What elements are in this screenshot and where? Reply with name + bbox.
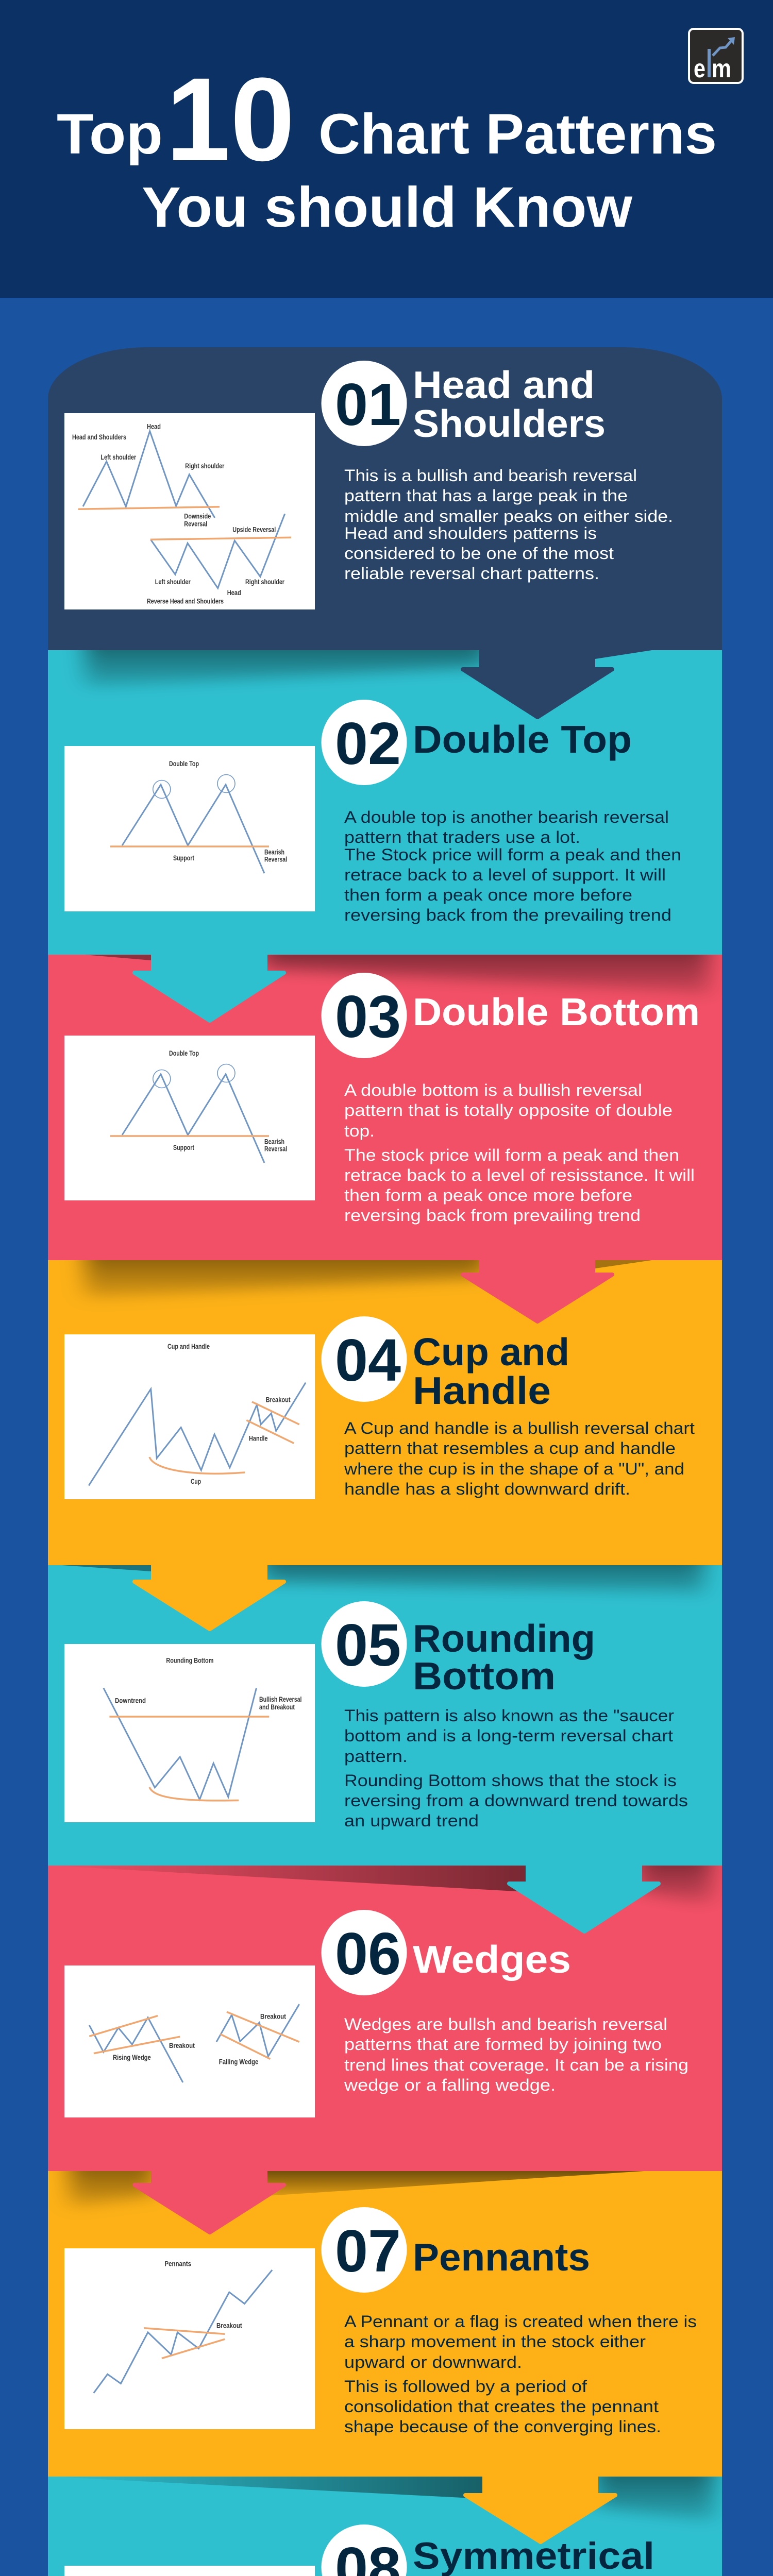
heading: cup and handle [413,1330,569,1412]
text block 07 [344,2312,697,2436]
number badge 03 [322,973,407,1058]
chart: head and shoulders: Head [147,423,161,431]
panel: 02 double top [48,634,722,955]
text block 06: patterns that are formed by joining two [344,2035,662,2054]
panel: 01 head and shoulders [48,347,722,650]
arrow 01 to 02 [463,648,612,717]
chart: cup and handle: Handle [249,1434,268,1442]
chart: double top: Double Top [169,760,199,768]
chart: double top: Bearish [264,848,284,856]
text block 03: retrace back to a level of resisstance. It will [344,1166,695,1184]
text block 05: This pattern is also known as the "saucer [344,1706,674,1725]
number badge 03: 03 [335,983,401,1050]
heading: double top: Double Top [413,718,632,761]
text block 02 [344,808,681,924]
text block 07: upward or downward. [344,2353,522,2371]
chart: head and shoulders: Right shoulder [245,578,285,586]
arrow 06 to 07 [135,2169,284,2232]
heading: pennants: Pennants [413,2235,590,2279]
chart: wedges: Falling Wedge [219,2058,259,2065]
chart: wedges: Rising Wedge [113,2054,151,2061]
icon: elm logo: e [694,54,705,83]
text block 05: bottom and is a long-term reversal chart [344,1726,673,1745]
chart: head and shoulders: Head [227,589,241,597]
number badge 02 [322,700,407,785]
text block 04: handle has a slight downward drift. [344,1480,630,1498]
number badge 05 [322,1601,407,1687]
number badge 01 [322,361,407,446]
text block 04: pattern that resembles a cup and handle [344,1439,676,1458]
text block 06: Wedges are bullsh and bearish reversal [344,2015,667,2033]
chart: head and shoulders: Reversal [184,520,207,528]
number badge 01: 01 [335,371,401,438]
chart: rounding bottom: and Breakout [259,1703,295,1711]
text block 03: pattern that is totally opposite of double [344,1101,673,1120]
chart: head and shoulders: Left shoulder [100,453,137,461]
text block 03: then form a peak once more before [344,1186,632,1205]
chart: head and shoulders: Reverse Head and Shoulders [147,598,224,605]
heading: head and shoulders: Head and [413,363,595,406]
heading: head and shoulders [413,363,606,445]
heading: cup and handle: Handle [413,1369,551,1412]
text block 02: then form a peak once more before [344,886,632,904]
chart: double bottom: Double Top [169,1049,199,1057]
text block 02: pattern that traders use a lot. [344,828,580,846]
heading: rounding bottom: Rounding [413,1617,595,1660]
number badge 04 [322,1316,407,1402]
panel: 08 symmetrical triangles [48,2477,722,2576]
heading: rounding bottom: Bottom [413,1654,556,1698]
chart: pennants: Breakout [216,2322,242,2330]
chart: wedges: Breakout [169,2042,195,2049]
text block 05: pattern. [344,1747,408,1766]
title: Top [57,103,163,166]
arrow 07 to 08 [465,2475,615,2542]
heading: symmetrical triangles: Symmetrical [413,2535,654,2576]
text block 02: reversing back from the prevailing trend [344,906,671,924]
text block 02: A double top is another bearish reversal [344,808,669,826]
text block 05: reversing from a downward trend towards [344,1791,688,1810]
text block 03: reversing back from prevailing trend [344,1206,641,1225]
text block 07: consolidation that creates the pennant [344,2397,659,2416]
number badge 04: 04 [335,1327,401,1394]
chart: head and shoulders: Downside [184,513,211,520]
arrow 02 to 03 [135,953,284,1021]
text block 01: considered to be one of the most [344,544,614,563]
number badge 05: 05 [335,1612,401,1679]
title: Chart Patterns [318,103,717,166]
chart: wedges: Breakout [260,2012,286,2020]
text block 03: top. [344,1122,375,1140]
chart: cup and handle: Cup and Handle [167,1343,210,1350]
icon: elm logo [689,29,743,83]
chart: head and shoulders: Left shoulder [155,578,191,586]
title [57,53,717,239]
number badge 07: 07 [335,2217,401,2284]
chart: head and shoulders: Head and Shoulders [72,433,126,441]
number badge 06 [322,1910,407,1995]
text block 05: Rounding Bottom shows that the stock is [344,1771,677,1790]
chart: cup and handle: Cup [191,1478,201,1485]
number badge 06: 06 [335,1920,401,1987]
chart: double top: Reversal [264,856,287,863]
panel: 07 pennants [48,2156,722,2477]
text block 04: where the cup is in the shape of a "U", and [344,1460,684,1478]
title: You should Know [142,176,632,239]
text block 07: A Pennant or a flag is created when there is [344,2312,697,2331]
chart: rounding bottom: Bullish Reversal [259,1696,302,1703]
chart: double bottom: Reversal [264,1145,287,1153]
text block 07: shape because of the converging lines. [344,2417,661,2436]
heading: rounding bottom [413,1617,595,1698]
chart: double bottom: Support [173,1144,194,1151]
chart: double bottom: Bearish [264,1138,284,1146]
header band [0,0,773,298]
text block 01: pattern that has a large peak in the [344,486,628,505]
text block 01 [344,466,673,583]
text block 03: A double bottom is a bullish reversal [344,1081,642,1099]
text block 06: trend lines that coverage. It can be a rising [344,2056,688,2074]
text block 06 [344,2015,688,2094]
text block 02: The Stock price will form a peak and then [344,845,681,864]
chart: wedges [64,1965,315,2117]
number badge 08 [322,2524,407,2576]
panel: 04 cup and handle [48,1244,722,1565]
text block 07: This is followed by a period of [344,2377,587,2396]
text block 01: Head and shoulders patterns is [344,524,597,543]
text block 06: wedge or a falling wedge. [344,2076,556,2094]
text block 05: an upward trend [344,1811,479,1830]
text block 04: A Cup and handle is a bullish reversal chart [344,1419,695,1437]
arrow 05 to 06 [509,1863,659,1931]
panel: 06 wedges [48,1850,722,2171]
text block 01: This is a bullish and bearish reversal [344,466,637,485]
heading: wedges: Wedges [413,1938,571,1981]
text block 07: a sharp movement in the stock either [344,2332,646,2351]
heading: cup and handle: Cup and [413,1330,569,1374]
text block 03 [344,1081,695,1225]
chart: double top [64,746,315,911]
text block 01: middle and smaller peaks on either side. [344,507,673,526]
number badge 07 [322,2207,407,2293]
chart: rounding bottom: Rounding Bottom [166,1657,213,1664]
title: 10 [166,53,295,185]
chart: rounding bottom [64,1644,315,1822]
chart: double top: Support [173,854,194,862]
chart: pennants: Pennants [165,2260,191,2268]
heading: double bottom: Double Bottom [413,990,700,1033]
text block 02: retrace back to a level of support. It will [344,866,666,884]
number badge 02: 02 [335,710,401,777]
icon: elm logo: m [712,54,731,83]
text block 05 [344,1706,688,1830]
text block 04 [344,1419,695,1498]
chart: rounding bottom: Downtrend [115,1697,146,1704]
chart: pennants [64,2248,315,2429]
chart: symmetrical triangles [64,2566,315,2576]
text block 01: reliable reversal chart patterns. [344,564,599,583]
chart: cup and handle: Breakout [266,1396,291,1404]
panel: 03 double bottom [48,938,722,1260]
chart: double bottom [64,1036,315,1200]
panel: 05 rounding bottom [48,1549,722,1866]
arrow 04 to 05 [135,1563,284,1629]
text block 03: The stock price will form a peak and then [344,1146,679,1164]
chart: cup and handle [64,1334,315,1499]
chart: head and shoulders [64,413,315,609]
heading: head and shoulders: Shoulders [413,402,606,445]
chart: head and shoulders: Upside Reversal [232,526,276,533]
arrow 03 to 04 [463,1258,612,1321]
chart: head and shoulders: Right shoulder [185,462,225,470]
